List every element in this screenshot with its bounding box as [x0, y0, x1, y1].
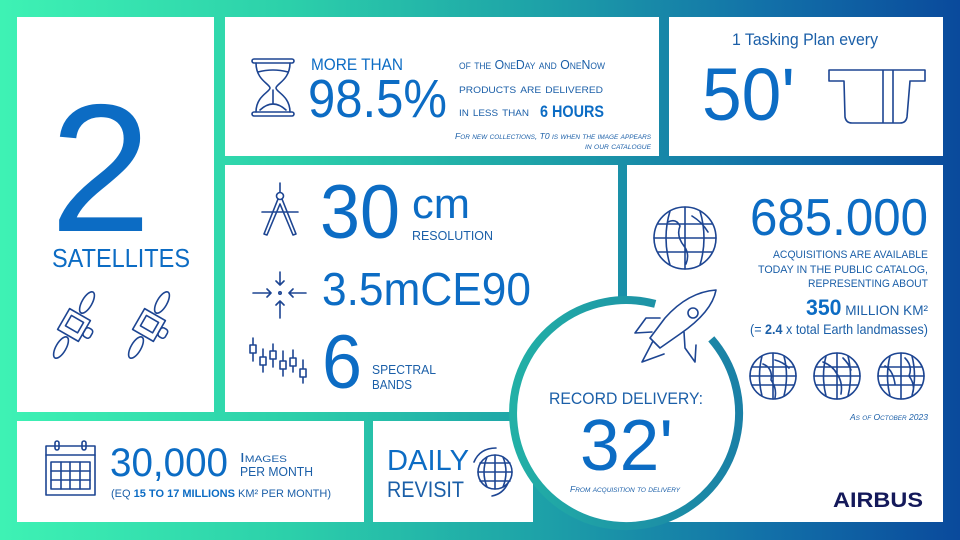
panel: catalog	[627, 165, 943, 522]
text: tasking plan: 1 Tasking Plan every	[732, 30, 878, 49]
callout: record delivery circle: 32'	[580, 406, 673, 486]
callout: record delivery circle: From acquisition to delivery	[570, 485, 681, 494]
footnote date: As of October 2023	[849, 413, 929, 422]
big number 2: 2	[50, 66, 151, 270]
text: products delivered	[459, 57, 605, 121]
panel: performance	[225, 165, 618, 412]
footnote: For new collections, T0 is when the image appears	[455, 132, 651, 141]
panel: images per month: (EQ 15 TO 17 MILLIONS KM² PER MONTH)	[111, 488, 331, 500]
icon: rocket	[635, 290, 716, 362]
panel: performance: cm	[412, 180, 470, 227]
panel: images per month	[17, 421, 364, 522]
text: acquisitions description: (= 2.4 x total Earth landmasses)	[750, 321, 928, 337]
panel: delivery rate	[225, 17, 659, 156]
text: 685.000: 685.000	[750, 189, 928, 247]
panel: performance: BANDS	[372, 377, 412, 392]
panel: tasking plan	[669, 17, 943, 156]
panel: daily revisit	[373, 421, 533, 522]
panel: images per month: PER MONTH	[240, 464, 313, 479]
text: acquisitions description: TODAY IN THE PUBLIC CATALOG,	[758, 264, 928, 276]
footnote	[455, 132, 652, 151]
panel: satellites	[17, 17, 214, 412]
icon: three globes	[750, 353, 924, 399]
icon: spectral bands	[250, 338, 306, 383]
panel: performance: RESOLUTION	[412, 228, 493, 243]
icon: accuracy arrows	[253, 272, 306, 318]
icon: satellites	[45, 286, 185, 368]
logo: airbus: AIRBUS	[833, 489, 923, 512]
panel: daily revisit: DAILY	[387, 445, 469, 477]
panel: delivery rate: 98.5%	[308, 69, 447, 129]
icon: calendar	[46, 441, 95, 495]
icon: hourglass	[252, 59, 294, 116]
icon: globe with arrows	[474, 448, 512, 496]
text: 6 spectral bands: 6	[322, 320, 362, 405]
panel: daily revisit: REVISIT	[387, 477, 464, 502]
text: acquisitions description	[750, 249, 928, 337]
text: products delivered: in less than	[459, 104, 529, 119]
text: products delivered: products are delivered	[459, 81, 604, 96]
text: 30 cm resolution: 30	[320, 170, 400, 255]
text: products delivered: of the OneDay and OneNow	[459, 57, 605, 72]
text: 3.5mCE90: 3.5mCE90	[322, 263, 531, 315]
footnote: in our catalogue	[585, 142, 652, 151]
text: more than 98.5%: MORE THAN	[311, 55, 403, 74]
icon: tasking	[829, 70, 925, 123]
panel: images per month: Images	[240, 450, 287, 465]
panel: performance: SPECTRAL	[372, 362, 436, 377]
text: acquisitions description: ACQUISITIONS ARE AVAILABLE	[773, 249, 928, 261]
label satellites: SATELLITES	[52, 243, 190, 273]
icon: globe large	[654, 207, 716, 269]
big number 50': 50'	[702, 53, 795, 136]
text: acquisitions description: REPRESENTING ABOUT	[808, 278, 928, 290]
text: acquisitions description: 350 MILLION KM²	[806, 295, 928, 320]
text: products delivered: 6 HOURS	[540, 102, 604, 121]
icon: compass	[262, 183, 298, 235]
text: record delivery: RECORD DELIVERY:	[549, 389, 703, 408]
callout: record delivery circle	[513, 290, 739, 526]
text: 30,000: 30,000	[110, 441, 228, 485]
